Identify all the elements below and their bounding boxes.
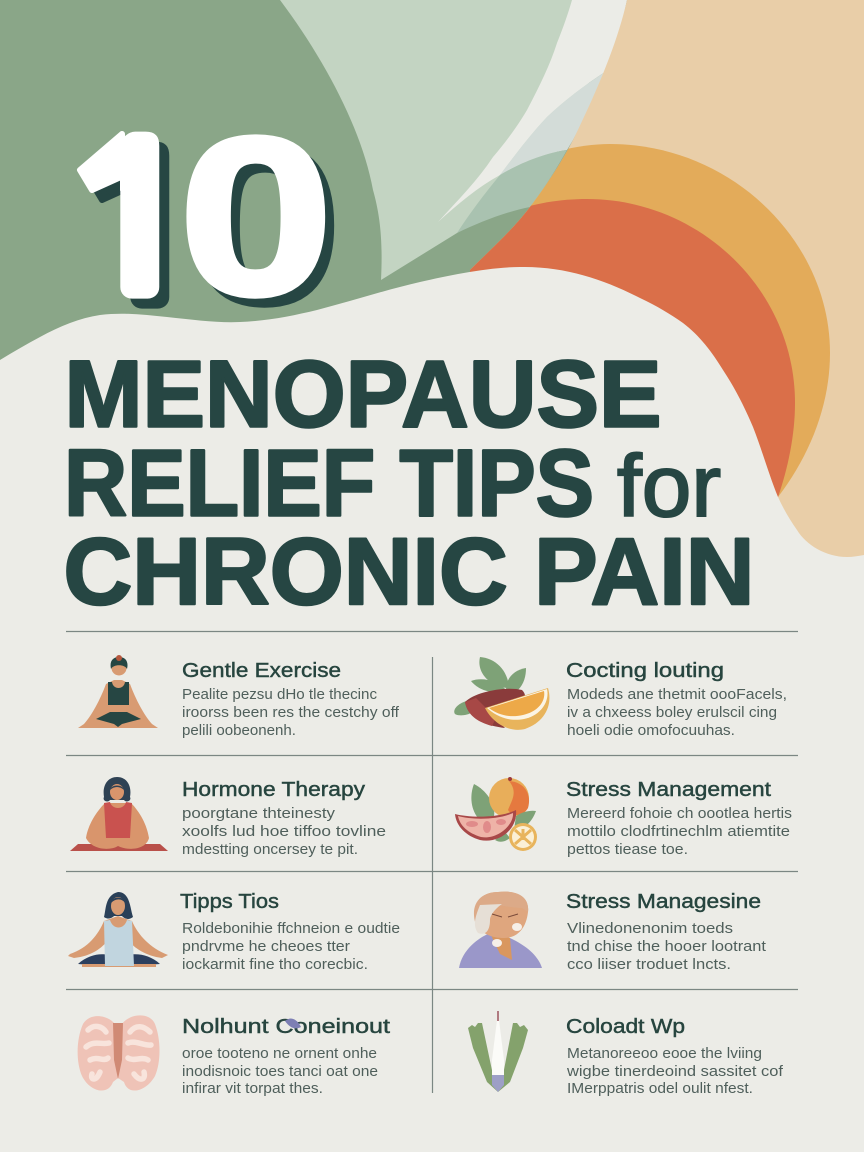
- background shapes: [0, 0, 864, 557]
- body text: iroorss been res the cestchy off: [182, 705, 400, 721]
- big number 10: [76, 131, 334, 309]
- big number 10: 1: [76, 125, 195, 319]
- title: MENOPAUSE: [64, 342, 662, 448]
- heading: Stress Managesine: [566, 891, 761, 913]
- icon: green hands and white spike: [468, 1011, 528, 1092]
- big number 10: 0: [188, 99, 342, 351]
- body text: [182, 921, 400, 973]
- body text: pelili oobeonenh.: [182, 723, 296, 739]
- body text: Metanoreeoo eooe the lviing: [567, 1046, 762, 1062]
- title: [64, 342, 754, 625]
- tip: Stress Management: [455, 777, 792, 858]
- title: CHRONIC PAIN: [64, 519, 754, 625]
- body text: inodisnoic toes tanci oat one: [182, 1064, 378, 1080]
- body text: Mereerd fohoie ch oootlea hertis: [567, 806, 792, 822]
- tip: Tipps Tios: [68, 891, 400, 973]
- icon: seated woman in dark top: [78, 655, 158, 728]
- heading: Coloadt Wp: [566, 1016, 685, 1038]
- grid lines: [66, 632, 798, 1093]
- body text: pettos tiease toe.: [567, 842, 688, 858]
- body text: oroe tooteno ne ornent onhe: [182, 1046, 377, 1062]
- body text: tnd chise the hooer lootrant: [567, 939, 766, 955]
- tip: Nolhunt Coneinout: [78, 1015, 391, 1097]
- body text: pndrvme he cheoes tter: [182, 939, 350, 955]
- body text: mdestting oncersey te pit.: [182, 842, 358, 858]
- body text: [567, 687, 787, 739]
- icon: cross-legged woman on mat: [70, 777, 168, 851]
- body text: mottilo clodfrtinechlm atiemtite: [567, 824, 790, 840]
- body text: iockarmit fine tho corecbic.: [182, 957, 368, 973]
- heading: Tipps Tios: [180, 891, 279, 913]
- body text: Vlinedonenonim toeds: [567, 921, 733, 937]
- heading: Nolhunt Coneinout: [182, 1016, 391, 1038]
- body text: iv a chxeess boley erulscil cing: [567, 705, 777, 721]
- body text: [182, 1046, 378, 1097]
- tip: Stress Managesine: [459, 891, 766, 973]
- body text: poorgtane thteinesty: [182, 806, 336, 822]
- tip: Hormone Therapy: [70, 777, 386, 858]
- tip: Coloadt Wp: [468, 1011, 784, 1097]
- body text: [182, 806, 386, 858]
- big number 10: 0: [178, 90, 334, 342]
- body text: [182, 687, 400, 739]
- big number 10: 1: [86, 135, 205, 329]
- tip: Gentle Exercise: [78, 655, 400, 739]
- heading: Hormone Therapy: [182, 779, 365, 801]
- title: for: [617, 438, 721, 535]
- icon: older woman portrait: [459, 892, 542, 968]
- body text: infirar vit torpat thes.: [182, 1081, 323, 1097]
- body text: IMerppatris odel oulit nfest.: [567, 1081, 753, 1097]
- heading: Cocting louting: [566, 660, 724, 682]
- icon: meditating woman in pale top: [68, 892, 168, 967]
- body text: [567, 806, 792, 858]
- heading: Gentle Exercise: [182, 660, 341, 682]
- body text: [566, 1046, 784, 1097]
- tip: Cocting louting: [454, 657, 787, 739]
- body text: xoolfs lud hoe tiffoo tovline: [182, 824, 386, 840]
- icon: pink organ: [78, 1015, 160, 1091]
- body text: [567, 921, 766, 973]
- heading: Stress Management: [566, 779, 771, 801]
- body text: cco liiser troduet lncts.: [567, 957, 731, 973]
- body text: Modeds ane thetmit oooFacels,: [567, 687, 787, 703]
- body text: hoeli odie omofocuuhas.: [567, 723, 735, 739]
- icon: fruit and leaves: [454, 657, 549, 730]
- icon: mango, melon and citrus: [455, 777, 537, 851]
- body text: wigbe tinerdeoind sassitet cof: [566, 1064, 784, 1080]
- body text: Roldebonihie ffchneion e oudtie: [182, 921, 400, 937]
- icon: purple swirl on heading: [285, 1019, 301, 1028]
- title: RELIEF TIPS: [64, 430, 594, 536]
- body text: Pealite pezsu dHo tle thecinc: [182, 687, 377, 703]
